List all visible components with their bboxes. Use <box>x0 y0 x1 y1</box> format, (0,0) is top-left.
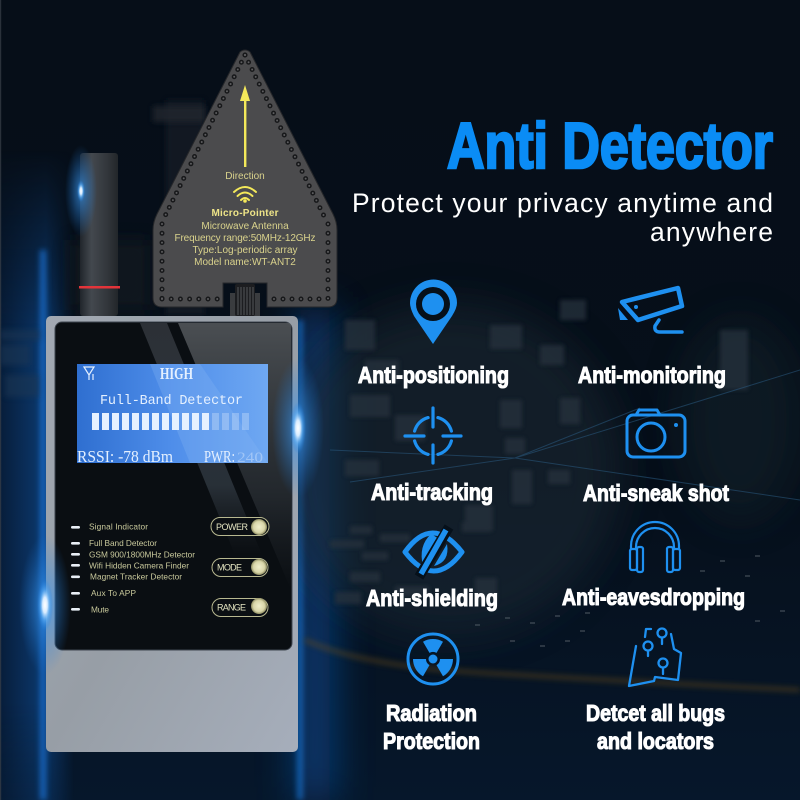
icon: photo camera <box>627 410 685 457</box>
device <box>46 316 298 752</box>
item: anti-shielding: Anti-shielding <box>366 585 498 611</box>
indicator list: Aux To APP <box>91 588 136 598</box>
item: anti-sneak shot <box>583 410 729 506</box>
item: detect bugs and locators <box>586 628 725 754</box>
device body <box>46 316 298 752</box>
antenna specs: Direction <box>225 171 265 182</box>
item: anti-monitoring <box>578 288 726 388</box>
item: anti-tracking: Anti-tracking <box>371 479 493 505</box>
directional antenna <box>153 50 337 307</box>
subtitle <box>352 188 773 247</box>
LCD screen: HIGH <box>160 364 193 383</box>
icon: radiation <box>408 634 458 684</box>
item: radiation protection: Radiation <box>386 700 477 726</box>
item: radiation protection: Protection <box>383 728 480 754</box>
LCD screen: RSSI: -78 dBm <box>77 447 173 466</box>
subtitle: anywhere <box>650 217 773 247</box>
indicator list <box>71 522 195 614</box>
LCD screen: PWR: <box>204 447 235 466</box>
direction arrow <box>240 85 250 167</box>
antenna specs: Type:Log-periodic array <box>192 245 298 256</box>
antenna specs: Microwave Antenna <box>201 221 289 232</box>
item: anti-positioning <box>358 280 509 388</box>
wifi icon <box>234 187 256 203</box>
icon: crossed eye <box>405 527 462 577</box>
item: anti-positioning: Anti-positioning <box>358 362 509 388</box>
signal bars <box>92 413 249 430</box>
LCD screen <box>77 364 268 466</box>
stub antenna <box>65 145 120 316</box>
power button <box>211 518 269 536</box>
indicator list: Signal Indicator <box>89 522 148 532</box>
mode button: MODE <box>217 562 242 572</box>
icon: CCTV camera <box>618 288 682 332</box>
antenna specs <box>174 171 316 268</box>
range button <box>212 598 268 616</box>
power button: POWER <box>216 522 248 532</box>
item: anti-tracking <box>371 408 493 505</box>
item: anti-shielding <box>366 527 498 611</box>
signal icon <box>84 367 94 380</box>
item: anti-eavesdropping <box>562 522 745 610</box>
lens flares <box>19 358 324 675</box>
antenna specs: Frequency range:50MHz-12GHz <box>174 233 316 244</box>
indicator list: GSM 900/1800MHz Detector <box>89 550 195 560</box>
icon: headphones <box>630 522 680 572</box>
item: radiation protection <box>383 634 480 754</box>
antenna connector <box>230 284 260 316</box>
antenna specs: Model name:WT-ANT2 <box>194 257 296 268</box>
range button: RANGE <box>217 602 246 612</box>
LCD screen: Full-Band Detector <box>100 394 243 409</box>
subtitle: Protect your privacy anytime and <box>352 188 773 218</box>
item: detect bugs and locators: and locators <box>597 728 714 754</box>
icon: crosshair <box>405 408 461 463</box>
front panel <box>55 322 292 650</box>
item: anti-sneak shot: Anti-sneak shot <box>583 480 729 506</box>
antenna specs: Micro-Pointer <box>212 208 279 219</box>
indicator list: Mute <box>91 604 109 614</box>
item: anti-eavesdropping: Anti-eavesdropping <box>562 584 745 610</box>
item: anti-monitoring: Anti-monitoring <box>578 362 726 388</box>
LCD screen: 240 <box>237 450 263 466</box>
mode button <box>212 558 268 576</box>
icon: location pin <box>410 280 457 344</box>
indicator list: Wifi Hidden Camera Finder <box>89 560 189 570</box>
item: detect bugs and locators: Detcet all bugs <box>586 700 725 726</box>
icon: map with pins <box>629 628 681 686</box>
indicator list: Magnet Tracker Detector <box>90 572 182 582</box>
indicator list: Full Band Detector <box>89 538 157 548</box>
